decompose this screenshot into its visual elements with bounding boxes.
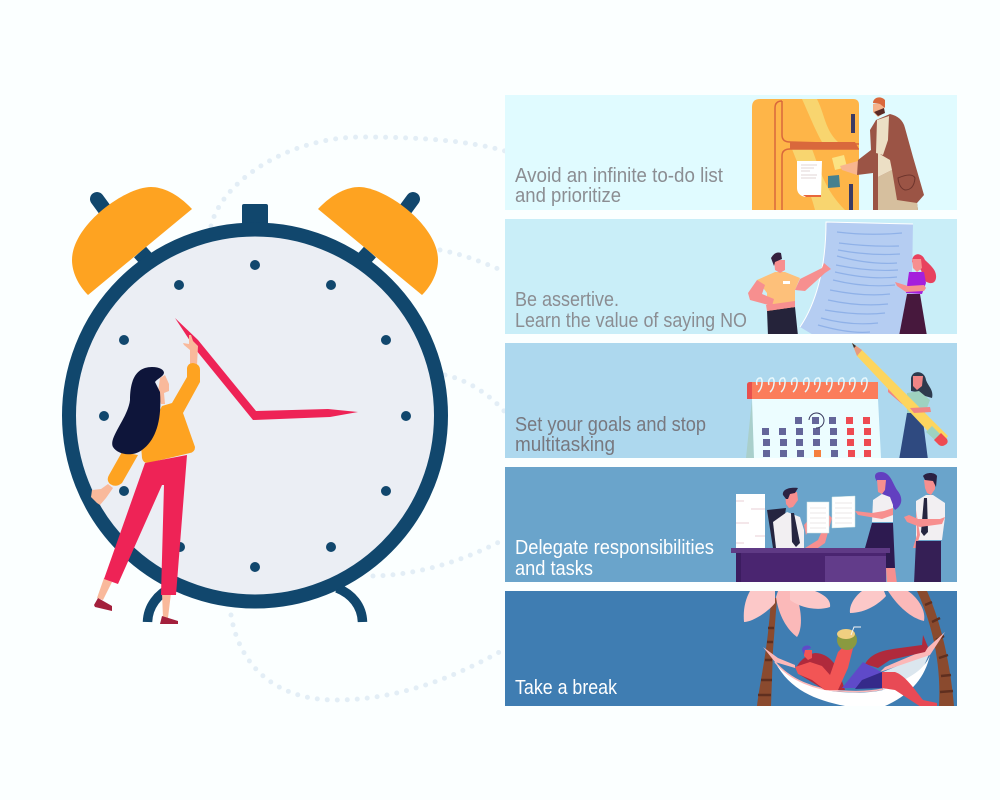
text: saying no: Learn the value of saying NO: [515, 309, 747, 332]
panel background: [505, 95, 957, 210]
text: delegate: and tasks: [515, 557, 593, 580]
trousers: [104, 455, 187, 595]
text: prioritize: [515, 164, 723, 207]
hour markers: [99, 260, 411, 572]
panel: set your goals: [505, 343, 957, 460]
clock face: [69, 230, 441, 602]
panel: delegate responsibilities: [505, 467, 957, 584]
sweater: [141, 363, 200, 463]
text: prioritize: and prioritize: [515, 184, 621, 207]
panel: be assertive: [505, 219, 957, 336]
panel background: [505, 467, 957, 582]
clock top knob: [242, 204, 268, 228]
sleeve: [108, 452, 138, 486]
woman moving the clock hand: [91, 335, 200, 624]
shoes: [94, 598, 178, 624]
panel: avoid an infinite to-do list: [505, 95, 957, 210]
raised arm skin: [183, 335, 198, 365]
illustration: man in hammock under palms: [744, 591, 954, 707]
text: take a break: Take a break: [515, 676, 618, 699]
illustration: fridge and man: [752, 97, 924, 210]
illustration: two people and a large document: [748, 222, 936, 336]
icon: left bell: [72, 187, 192, 295]
text: saying no: [515, 288, 747, 332]
illustration: office team at desk: [731, 472, 945, 584]
panel background: [505, 219, 957, 334]
text: goals and multitasking: [515, 413, 706, 456]
rear legs skin: [97, 578, 171, 618]
text: saying no: Be assertive.: [515, 288, 619, 311]
lower arm and hand: [91, 484, 113, 505]
icon: right bell: [318, 187, 438, 295]
neck and face: [158, 375, 169, 404]
text: delegate: [515, 536, 714, 580]
dotted connectors: [211, 137, 505, 700]
text: goals and multitasking: multitasking: [515, 433, 615, 456]
panel: take a break: [505, 591, 957, 707]
text: goals and multitasking: Set your goals and stop: [515, 413, 706, 436]
text: prioritize: Avoid an infinite to-do list: [515, 164, 723, 187]
hair: [112, 367, 164, 454]
alarm clock: [69, 187, 441, 622]
text: delegate: Delegate responsibilities: [515, 536, 714, 559]
panel background: [505, 343, 957, 458]
clock feet: [148, 587, 362, 622]
illustration: calendar and woman with pencil: [746, 343, 948, 460]
panel background: [505, 591, 957, 706]
clock hands: [175, 318, 358, 420]
